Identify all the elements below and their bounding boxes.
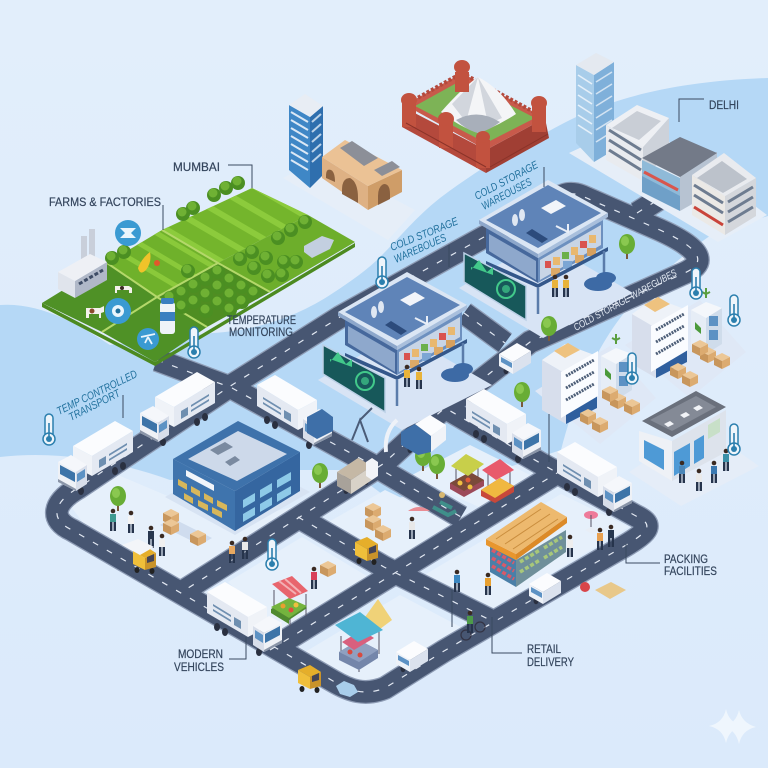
- label: Cold Storage left: COLD STORAGE: [389, 215, 460, 254]
- fort towers: [401, 60, 547, 168]
- label: Cold Storage on road: COLD STORAGE WAREGUBES: [572, 268, 679, 334]
- building: Delhi office A: [606, 105, 669, 181]
- auto rickshaws: [122, 537, 378, 693]
- label: Retail Delivery: DELIVERY: [527, 657, 574, 669]
- boxes at warehouse: [160, 509, 212, 546]
- river band: [0, 78, 768, 500]
- label: Temperature Monitoring: MONITORING: [229, 327, 293, 339]
- red bag: [580, 582, 590, 592]
- blue service truck: [401, 415, 446, 455]
- cold storage warehouse 2: [459, 180, 633, 338]
- icon: drone badge: [115, 220, 141, 246]
- building: Mumbai tower: [289, 94, 323, 188]
- farm trees: [105, 176, 312, 318]
- building: Delhi tower: [576, 53, 614, 162]
- red market stall: [271, 576, 308, 626]
- farm land: [42, 172, 355, 366]
- small vans: [396, 343, 561, 672]
- label: Modern Vehicles: VEHICLES: [174, 662, 224, 674]
- fruit market stall: [481, 459, 514, 503]
- plate and store building: [629, 391, 759, 506]
- label: Retail Delivery: RETAIL: [527, 644, 562, 656]
- label: Temp Controlled Transport: TEMP CONTROLLED: [55, 368, 139, 418]
- grey cargo truck: [337, 458, 378, 494]
- small kiosk: [595, 582, 626, 599]
- label: Farms & Factories: FARMS & FACTORIES: [49, 197, 161, 209]
- packing building group 1: [625, 288, 746, 398]
- thermometers: [43, 257, 740, 570]
- plate: Delhi buildings: [569, 120, 767, 242]
- icon: water badge: [105, 298, 131, 324]
- building: Gateway of India: [322, 140, 402, 210]
- icon: bottle: [160, 298, 175, 334]
- workers at warehouses: [404, 275, 569, 389]
- delivery trucks: [58, 372, 632, 656]
- pink parasol: [584, 511, 598, 534]
- label: Cold Storage left: WAREBOUES: [392, 232, 449, 266]
- label leaders: [123, 99, 704, 659]
- golden crop icon: [138, 252, 150, 273]
- people at store: [679, 449, 729, 491]
- cold storage warehouse 1: [318, 272, 492, 430]
- label: Cold Storage top: COLD STORAGE: [473, 159, 541, 203]
- robot arm and tripod: [352, 408, 397, 452]
- label: Modern Vehicles: MODERN: [178, 649, 223, 661]
- building: Delhi office C: [692, 153, 756, 235]
- lotus temple: [441, 77, 516, 133]
- label: Cold Storage top: WAREOUSES: [480, 176, 534, 213]
- label: Packing Facilities: PACKING: [664, 554, 708, 566]
- packing building group 2: [535, 334, 656, 444]
- factory: [58, 229, 107, 298]
- people and carts, left lot: [110, 509, 248, 563]
- label: Temp Controlled Transport: [55, 368, 139, 424]
- trees: [110, 234, 635, 511]
- retail store: [486, 502, 567, 587]
- ice packs: [336, 681, 358, 697]
- blue warehouse: [173, 421, 300, 531]
- building: Delhi office B: [642, 137, 717, 211]
- flower market stall: [450, 454, 484, 497]
- label: Delhi: DELHI: [709, 100, 739, 112]
- cows: [86, 286, 132, 318]
- boxes at centre lot: [320, 503, 391, 577]
- plate: Mumbai landmarks: [283, 160, 415, 240]
- label: Packing Facilities: FACILITIES: [664, 566, 717, 578]
- lots: [72, 445, 629, 686]
- label: Temperature Monitoring: TEMPERATURE: [227, 315, 296, 327]
- icon: wind badge: [137, 328, 159, 350]
- parasols and people at centre: [311, 507, 614, 595]
- label: Mumbai: MUMBAI: [173, 162, 220, 174]
- road network: [57, 194, 698, 692]
- label: Cold Storage top: [473, 159, 541, 213]
- sparkle watermark: [709, 709, 756, 744]
- scooter and bicycle: [433, 492, 485, 640]
- blue warehouse plate: [165, 455, 310, 535]
- cold pallets: [441, 272, 616, 382]
- red fort: [401, 60, 549, 173]
- label: Temp Controlled Transport: TRANSPORT: [67, 387, 123, 424]
- blue market stall: [335, 599, 392, 672]
- farm machine: [304, 236, 334, 258]
